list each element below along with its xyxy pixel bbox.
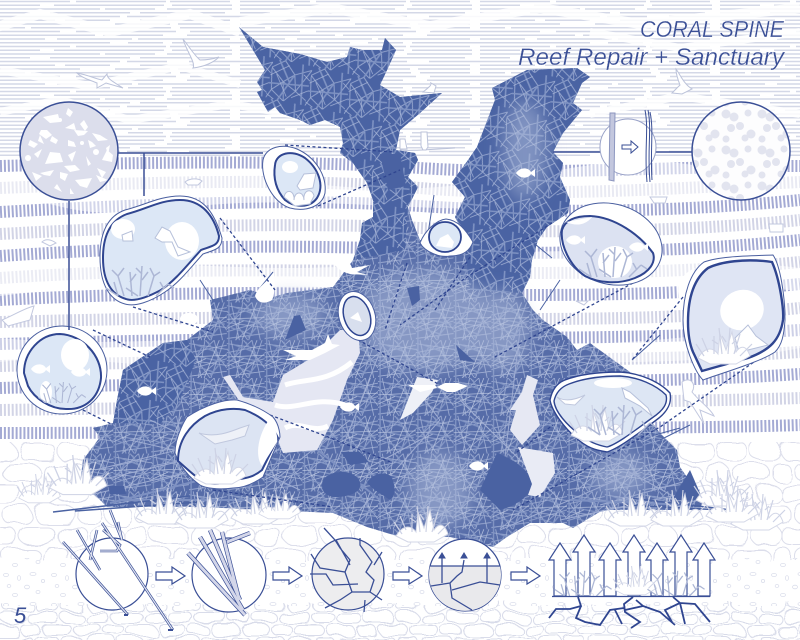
step 5: reef growth arrows and roots: [549, 535, 715, 628]
mesh: right tower: [452, 68, 590, 293]
arrow: [156, 567, 185, 584]
arrow: [511, 567, 540, 584]
mesh: upper left arm: [239, 27, 442, 260]
swimmers and fish over structure: [137, 168, 695, 471]
detail circle: aggregate texture: [20, 102, 118, 200]
loose sticks: [53, 195, 740, 512]
bubble: centre lower: [175, 400, 280, 489]
coral spine silhouette: [80, 27, 703, 547]
dashed leader lines: [83, 145, 767, 510]
bubble: large left: [100, 196, 222, 305]
dark solid voids: [108, 154, 703, 510]
title: Reef Repair + Sanctuary: [518, 44, 786, 71]
bubble: right top: [550, 191, 672, 297]
mesh: left buttress: [113, 340, 196, 424]
birds and figures on the horizon: [77, 39, 692, 150]
open windows through the structure: [223, 330, 555, 497]
lighter mottled strand areas: [255, 100, 650, 528]
step 2: bundled rods: [188, 530, 266, 615]
bubble: top small: [263, 146, 325, 209]
sea creatures in the water: [2, 179, 783, 424]
bubble: centre small: [332, 287, 382, 345]
detail circle: rod to wire: [600, 110, 656, 182]
bubble: far right: [683, 255, 785, 380]
bubble: centre top: [420, 219, 473, 256]
seafloor cobbles and pebbles: [0, 442, 800, 640]
title: CORAL SPINE: [640, 16, 785, 42]
step 4: growth arrows from cracks: [429, 539, 501, 611]
step 3: concrete cracks: [310, 528, 384, 612]
background sky: [0, 0, 800, 160]
arrow: [393, 567, 422, 584]
background sea with wavy bar rows: [0, 158, 800, 450]
step 1: loose rods: [63, 510, 173, 630]
detail circle: polyps texture: [692, 102, 790, 200]
seabed corals: [17, 455, 785, 542]
bubble: lower right: [550, 372, 670, 452]
arrow: [273, 567, 302, 584]
page number: 5: [14, 603, 27, 628]
bubble: lower left: [17, 326, 107, 414]
long strand bundles: [90, 290, 700, 530]
title: [518, 16, 786, 71]
connector lines: [69, 152, 692, 330]
